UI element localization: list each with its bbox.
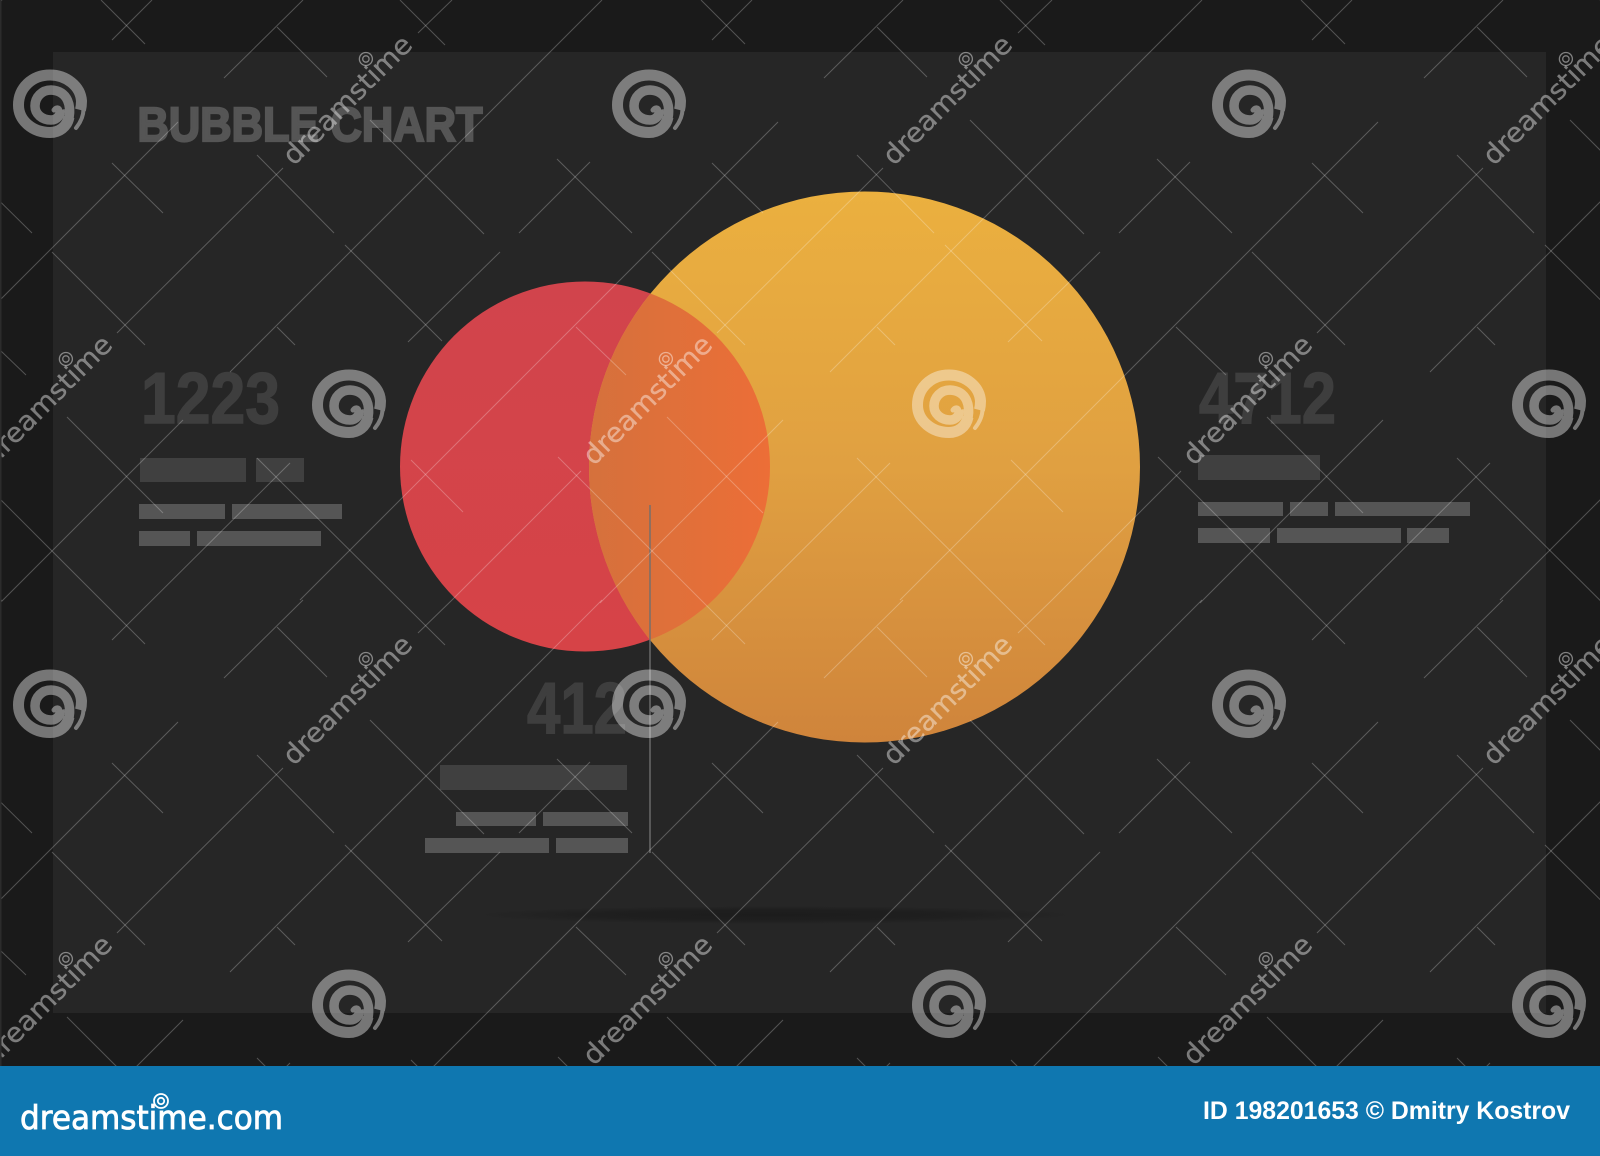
number 412: 412 xyxy=(527,669,627,749)
placeholder text bars xyxy=(139,504,342,546)
bubble chart xyxy=(400,192,1140,742)
leader line xyxy=(649,505,651,853)
watermark overlay: dreamstime xyxy=(277,629,419,771)
bubble overlap xyxy=(589,294,770,640)
watermark overlay: dreamstime xyxy=(1177,929,1319,1071)
watermark overlay: dreamstime xyxy=(577,929,719,1071)
title: BUBBLE CHART xyxy=(138,99,482,152)
watermark overlay: dreamstime xyxy=(277,29,419,171)
placeholder heading bar xyxy=(440,765,627,790)
left edge strip xyxy=(0,0,2,1066)
panel: chart card xyxy=(53,52,1546,1013)
watermark overlay: dreamstime xyxy=(877,29,1019,171)
placeholder text bars xyxy=(425,812,628,853)
placeholder text bars xyxy=(1198,502,1470,543)
number 1223: 1223 xyxy=(141,359,280,439)
red bubble xyxy=(400,282,770,652)
watermark overlay: dreamstime xyxy=(577,329,719,471)
watermark overlay: dreamstime xyxy=(877,629,1019,771)
footer logo: dreamstime.com xyxy=(20,1098,283,1137)
number 4712: 4712 xyxy=(1199,359,1336,439)
drop shadow under bubbles xyxy=(475,906,1075,924)
data block: 1223 xyxy=(139,359,342,546)
placeholder heading bars xyxy=(140,458,304,482)
orange bubble xyxy=(589,192,1140,742)
footer band xyxy=(0,1066,1600,1156)
watermark overlay: dreamstime xyxy=(1177,329,1319,471)
footer credit: ID 198201653 © Dmitry Kostrov xyxy=(1203,1097,1570,1125)
data block: 412 xyxy=(425,669,628,853)
placeholder heading bar xyxy=(1198,455,1320,480)
data block: 4712 xyxy=(1198,359,1470,543)
